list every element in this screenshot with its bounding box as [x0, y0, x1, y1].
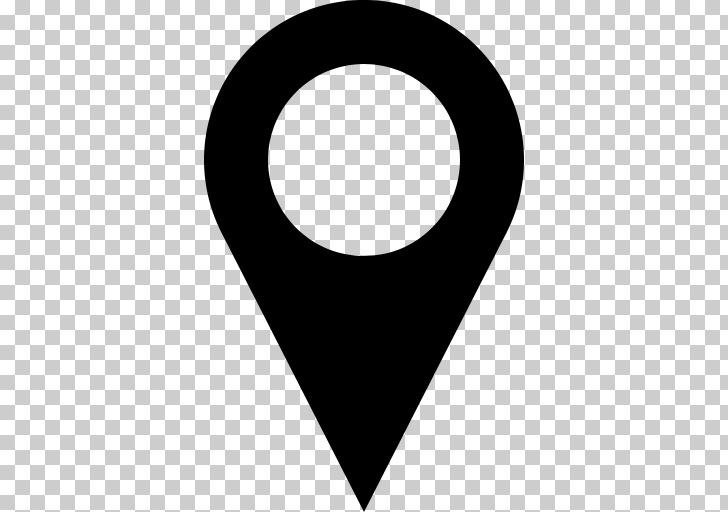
icon: map pin with circular hole — [204, 0, 524, 512]
